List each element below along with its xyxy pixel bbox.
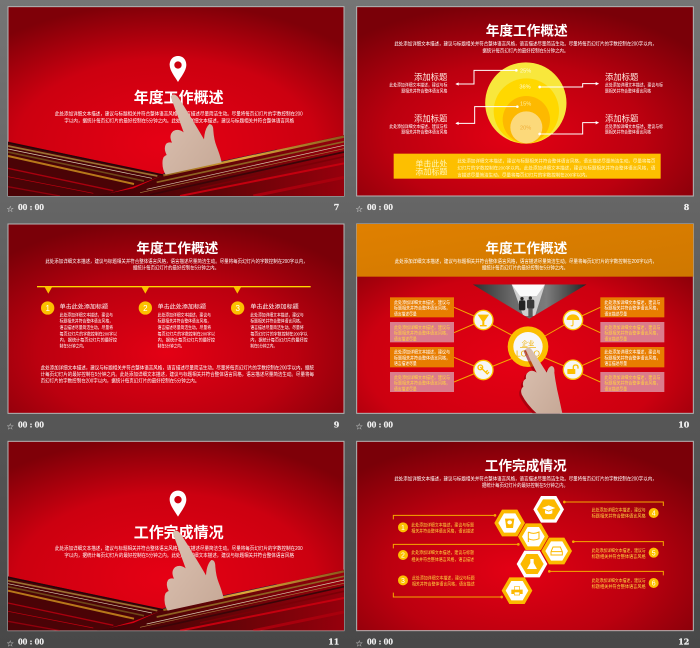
title: 工作完成情况 bbox=[485, 457, 567, 473]
point 1: 此处添加详细文本描述，建议与 bbox=[60, 312, 113, 319]
text box: left 4: 语言描述尽量 bbox=[394, 385, 417, 392]
point 1: 1 bbox=[45, 304, 50, 313]
point 3: 每页幻灯片的字数控制在200字以 bbox=[250, 330, 308, 337]
hexagon: tray bbox=[541, 538, 572, 564]
point 2: 每页幻灯片的字数控制在200字以 bbox=[158, 330, 215, 337]
intro text bbox=[395, 257, 657, 272]
footer: time: 00 : 00 bbox=[18, 202, 44, 212]
item 5: 标题相关并符合整体语言风格 bbox=[592, 553, 646, 560]
page number: 12 bbox=[678, 637, 689, 647]
callout banner: 添加标题 bbox=[415, 166, 447, 176]
item 4 bbox=[592, 506, 659, 519]
item 2 bbox=[398, 549, 474, 563]
point 1 bbox=[41, 301, 117, 350]
item 1 bbox=[398, 521, 474, 535]
ribbons bbox=[8, 135, 344, 196]
title: 年度工作概述 bbox=[486, 22, 568, 38]
bottom paragraph: 页幻灯片的字数控制在200字以内，据统计每页幻灯片的最好控制在5分钟之内。 bbox=[41, 377, 199, 385]
item 3: 3 bbox=[401, 578, 405, 585]
slide 12: hexagon list bbox=[355, 441, 693, 648]
text box: right 4 bbox=[600, 372, 664, 392]
footer: time: ☆ bbox=[355, 205, 363, 215]
item 6: 标题相关并符合整体语言风格 bbox=[592, 583, 646, 590]
text box: left 4 bbox=[390, 372, 454, 392]
point 1: 语言描述尽量简洁生动。尽量将 bbox=[60, 324, 113, 331]
text box: right 4: 标题相关并符合整体语言风格， bbox=[604, 380, 660, 387]
text box: right 2 bbox=[600, 322, 664, 342]
callout banner: 言描述尽量简洁生动。尽量将每页幻灯片的字数控制在200字以内。 bbox=[457, 172, 590, 179]
item 2: 此处添加详细文本描述，建议与标题 bbox=[411, 549, 474, 556]
bottom paragraph: 此处添加详细文本描述，建议与标题相关并符合整体语言风格，语言描述尽量简洁生动。尽量将每页幻灯片的字数控制在200字以内，据统 bbox=[41, 363, 314, 371]
intro text: 此处添加详细文本描述，建议与标题相关并符合整体语言风格，语言描述尽量简洁生动。尽量将每页幻灯片的字数控制在200 bbox=[55, 544, 303, 552]
label: bottom left bbox=[389, 113, 448, 136]
nested circle chart: 36% bbox=[519, 84, 531, 90]
point 1: 内，据统计每页幻灯片的最好控 bbox=[60, 336, 117, 343]
callout banner: 幻灯片的字数控制在200字以内。此处添加详细文本描述，建议与标题相关并符合整体语言风格，语 bbox=[457, 165, 655, 172]
page number: 11 bbox=[328, 637, 339, 647]
item 2: 2 bbox=[401, 553, 405, 560]
hexagon: cup bbox=[494, 510, 525, 536]
point 2 bbox=[139, 301, 215, 350]
connector lines bbox=[454, 307, 600, 382]
nested circle chart bbox=[485, 62, 566, 144]
slide 11: section cover bbox=[6, 441, 344, 648]
icon: goblet bbox=[474, 310, 493, 330]
label: top right: 题相关并符合整体语言风格 bbox=[605, 87, 651, 94]
point 2: 制在5分钟之内。 bbox=[158, 343, 184, 350]
item 6: 此处添加详细文本描述，建议与 bbox=[592, 577, 646, 584]
point 3: 此处添加详细文本描述，建议与 bbox=[250, 312, 304, 319]
nested circle chart: 15% bbox=[520, 101, 531, 107]
footer: time bbox=[355, 637, 393, 648]
point 3 bbox=[231, 301, 308, 350]
icon: location pin bbox=[170, 56, 186, 82]
footer: time: 00 : 00 bbox=[18, 637, 44, 647]
footer: time: 00 : 00 bbox=[367, 419, 393, 429]
text box: left 2: 此处添加详细文本描述，建议与 bbox=[394, 324, 450, 331]
intro text bbox=[394, 39, 657, 54]
footer: time: ☆ bbox=[6, 422, 14, 432]
label: top left: 添加标题 bbox=[414, 72, 448, 82]
label: top right bbox=[605, 72, 663, 94]
footer: time bbox=[6, 202, 44, 215]
text box: right 3 bbox=[600, 347, 664, 367]
footer: time: ☆ bbox=[355, 422, 363, 432]
intro text: 此处添加详细文本描述，建议与标题相关并符合整体语言风格，语言描述尽量简洁生动。尽量将每页幻灯片的字数控制在200字以内， bbox=[395, 257, 657, 265]
icon: location pin bbox=[170, 491, 186, 517]
callout banner: 此处添加详细文本描述，建议与标题相关并符合整体语言风格，语言描述尽量简洁生动。尽量将每页 bbox=[457, 158, 655, 165]
hexagon: printer bbox=[502, 577, 532, 604]
icon: open lock bbox=[563, 360, 583, 379]
item 2: 相关并符合整体语言风格，语言描述 bbox=[411, 556, 474, 563]
text box: right 2: 此处添加详细文本描述，建议与 bbox=[604, 324, 660, 331]
text box: right 4: 语言描述尽量 bbox=[604, 385, 627, 392]
point 3: 标题相关并符合整体语言风格， bbox=[250, 318, 304, 325]
center logo: LOGO bbox=[516, 348, 541, 358]
slide 10: logo hub diagram bbox=[355, 224, 693, 432]
point 2: 标题相关并符合整体语言风格， bbox=[158, 318, 211, 325]
page number: 8 bbox=[684, 202, 690, 212]
point 3: 内，据统计每页幻灯片的最好控 bbox=[250, 336, 308, 343]
item 3: 相关并符合整体语言风格，语言描述 bbox=[412, 581, 475, 588]
item 6 bbox=[592, 577, 659, 590]
label: bottom right: 此处添加详细文本描述，建议与标 bbox=[605, 123, 663, 130]
text box: right 4: 此处添加详细文本描述，建议与 bbox=[604, 374, 660, 381]
item 6: 6 bbox=[652, 581, 656, 588]
arrow: bottom left bbox=[455, 105, 519, 125]
point 2: 此处添加详细文本描述，建议与 bbox=[158, 312, 211, 319]
center logo: 企业 bbox=[522, 339, 534, 348]
header band bbox=[357, 224, 693, 277]
intro text: 此处添加详细文本描述，建议与标题相关并符合整体语言风格，语言描述尽量简洁生动。尽量将每页幻灯片的字数控制在200 bbox=[55, 109, 303, 117]
text box: left 2 bbox=[390, 322, 454, 342]
point 2: 内，据统计每页幻灯片的最好控 bbox=[158, 336, 215, 343]
text box: left 1: 标题相关并符合整体语言风格， bbox=[394, 305, 450, 312]
nested circle chart: 25% bbox=[520, 69, 531, 75]
item 3: 此处添加详细文本描述，建议与标题 bbox=[412, 575, 475, 582]
text box: right 2: 标题相关并符合整体语言风格， bbox=[604, 330, 660, 337]
slide 8: nested circles bbox=[355, 7, 693, 215]
point 1: 制在5分钟之内。 bbox=[60, 343, 86, 350]
ribbons bbox=[8, 570, 344, 631]
item 5: 此处添加详细文本描述，建议与 bbox=[592, 547, 646, 554]
point 3: 单击此处添加标题 bbox=[250, 303, 299, 311]
item 1: 此处添加详细文本描述，建议与标题 bbox=[411, 521, 474, 528]
icon: umbrella bbox=[563, 310, 583, 330]
label: bottom right: 题相关并符合整体语言风格 bbox=[605, 129, 651, 136]
item 5 bbox=[592, 547, 659, 560]
text box: left 1: 此处添加详细文本描述，建议与 bbox=[394, 299, 450, 306]
text box: right 2: 语言描述尽量 bbox=[604, 335, 627, 342]
footer: time bbox=[355, 202, 393, 215]
title: 年度工作概述 bbox=[136, 240, 219, 256]
label: bottom left: 题相关并符合整体语言风格 bbox=[401, 129, 447, 136]
text box: left 3: 标题相关并符合整体语言风格， bbox=[394, 354, 450, 361]
timeline bar bbox=[37, 286, 311, 294]
footer: time bbox=[355, 419, 393, 432]
label: bottom left: 添加标题 bbox=[414, 113, 448, 123]
text box: left 3 bbox=[390, 347, 454, 367]
intro text: 此处添加详细文本描述，建议与标题相关并符合整体语言风格，语言描述尽量简洁生动。尽量将每页幻灯片的字数控制在200字以内， bbox=[394, 474, 657, 482]
callout banner: 单击此处 bbox=[415, 158, 447, 168]
photo: two people in corridor bbox=[473, 284, 587, 319]
point 3: 3 bbox=[235, 304, 240, 313]
slide 7: section cover bbox=[6, 7, 344, 215]
intro text bbox=[45, 257, 308, 272]
text box: left 4: 此处添加详细文本描述，建议与 bbox=[394, 374, 450, 381]
center logo bbox=[508, 326, 548, 367]
bottom paragraph bbox=[41, 363, 314, 385]
hexagon: graduation cap bbox=[533, 496, 564, 523]
hand pointing bbox=[164, 530, 224, 611]
text box: left 2: 语言描述尽量 bbox=[394, 335, 417, 342]
text box: right 1 bbox=[600, 297, 664, 317]
text box: left 3: 语言描述尽量 bbox=[394, 360, 417, 367]
point 1: 单击此处添加标题 bbox=[60, 303, 108, 311]
nested circle chart: 20% bbox=[520, 125, 531, 131]
intro text: 据统计每页幻灯片的最好控制在5分钟之内。 bbox=[133, 264, 219, 272]
text box: left 1: 语言描述尽量 bbox=[394, 310, 417, 317]
label: top right: 添加标题 bbox=[605, 72, 639, 82]
arrow: top left bbox=[455, 69, 518, 86]
hand pointing bbox=[519, 347, 562, 415]
intro text bbox=[55, 544, 303, 559]
point 1: 每页幻灯片的字数控制在200字以 bbox=[60, 330, 117, 337]
intro text bbox=[55, 109, 303, 124]
intro text: 据统计每页幻灯片的最好控制在5分钟之内。 bbox=[482, 264, 568, 272]
point 2: 2 bbox=[143, 304, 148, 313]
title: 年度工作概述 bbox=[485, 240, 568, 256]
icon: key bbox=[474, 360, 493, 380]
arrow: bottom right bbox=[538, 121, 599, 135]
label: top left: 此处添加详细文本描述，建议与标 bbox=[389, 81, 447, 88]
intro text: 据统计每页幻灯片的最好控制在5分钟之内。 bbox=[482, 481, 568, 489]
intro text: 此处添加详细文本描述，建议与标题相关并符合整体语言风格，语言描述尽量简洁生动。尽量将每页幻灯片的字数控制在200字以内， bbox=[394, 39, 657, 47]
footer: time bbox=[6, 419, 44, 432]
text box: left 1 bbox=[390, 297, 454, 317]
callout banner bbox=[394, 154, 661, 179]
label: top left: 题相关并符合整体语言风格 bbox=[401, 87, 447, 94]
arrow: top right bbox=[538, 82, 599, 88]
label: bottom right: 添加标题 bbox=[605, 113, 639, 123]
footer: time: 00 : 00 bbox=[367, 202, 393, 212]
footer: time: 00 : 00 bbox=[18, 419, 44, 429]
slide 9: three numbered points bbox=[6, 224, 344, 432]
intro text: 字以内，据统计每页幻灯片的最好控制在5分钟之内。此处添加详细文本描述，建议与标题相关并符合整体语言风格 bbox=[64, 551, 295, 559]
hexagon: flask bbox=[517, 551, 547, 577]
label: top right: 此处添加详细文本描述，建议与标 bbox=[605, 81, 663, 88]
hexagon: flag bbox=[518, 523, 549, 550]
intro text bbox=[394, 474, 657, 489]
label: top left bbox=[389, 72, 448, 94]
text box: right 3: 标题相关并符合整体语言风格， bbox=[604, 354, 660, 361]
text box: right 1: 语言描述尽量 bbox=[604, 310, 627, 317]
connector lines bbox=[393, 501, 663, 598]
title: 工作完成情况 bbox=[134, 524, 224, 542]
point 2: 单击此处添加标题 bbox=[158, 303, 206, 311]
item 4: 4 bbox=[652, 511, 656, 518]
footer: time bbox=[6, 637, 44, 648]
intro text: 据统计每页幻灯片的最好控制在5分钟之内。 bbox=[482, 46, 568, 54]
page number: 7 bbox=[334, 202, 339, 212]
footer: time: 00 : 00 bbox=[367, 637, 393, 647]
point 3: 制在5分钟之内。 bbox=[250, 343, 277, 350]
point 1: 标题相关并符合整体语言风格， bbox=[60, 318, 113, 325]
item 4: 标题相关并符合整体语言风格 bbox=[592, 512, 646, 519]
item 4: 此处添加详细文本描述，建议与 bbox=[592, 506, 646, 513]
label: bottom right bbox=[605, 113, 663, 136]
item 5: 5 bbox=[652, 550, 656, 557]
page number: 10 bbox=[678, 419, 690, 429]
intro text: 此处添加详细文本描述，建议与标题相关并符合整体语言风格，语言描述尽量简洁生动。尽量将每页幻灯片的字数控制在200字以内， bbox=[45, 257, 308, 265]
text box: right 1: 此处添加详细文本描述，建议与 bbox=[604, 299, 660, 306]
text box: left 4: 标题相关并符合整体语言风格， bbox=[394, 380, 450, 387]
item 1: 相关并符合整体语言风格，语言描述 bbox=[411, 528, 474, 535]
text box: right 1: 标题相关并符合整体语言风格， bbox=[604, 305, 660, 312]
text box: right 3: 语言描述尽量 bbox=[604, 360, 627, 367]
page number: 9 bbox=[334, 419, 340, 429]
bottom paragraph: 计每页幻灯片的最好控制在5分钟之内。此处添加详细文本描述，建议与标题相关并符合整体语言风格，语言描述尽量简洁生动。尽量将每 bbox=[41, 370, 314, 378]
title: 年度工作概述 bbox=[134, 89, 224, 107]
text box: right 3: 此处添加详细文本描述，建议与 bbox=[604, 349, 660, 356]
text box: left 3: 此处添加详细文本描述，建议与 bbox=[394, 349, 450, 356]
hand pointing bbox=[162, 94, 222, 175]
intro text: 字以内，据统计每页幻灯片的最好控制在5分钟之内。此处添加详细文本描述，建议与标题相关并符合整体语言风格 bbox=[64, 116, 295, 124]
text box: left 2: 标题相关并符合整体语言风格， bbox=[394, 330, 450, 337]
item 1: 1 bbox=[401, 525, 405, 532]
point 3: 语言描述尽量简洁生动。尽量将 bbox=[250, 324, 304, 331]
footer: time: ☆ bbox=[6, 205, 14, 215]
label: bottom left: 此处添加详细文本描述，建议与标 bbox=[389, 123, 447, 130]
item 3 bbox=[398, 575, 475, 588]
point 2: 语言描述尽量简洁生动。尽量将 bbox=[158, 324, 211, 331]
